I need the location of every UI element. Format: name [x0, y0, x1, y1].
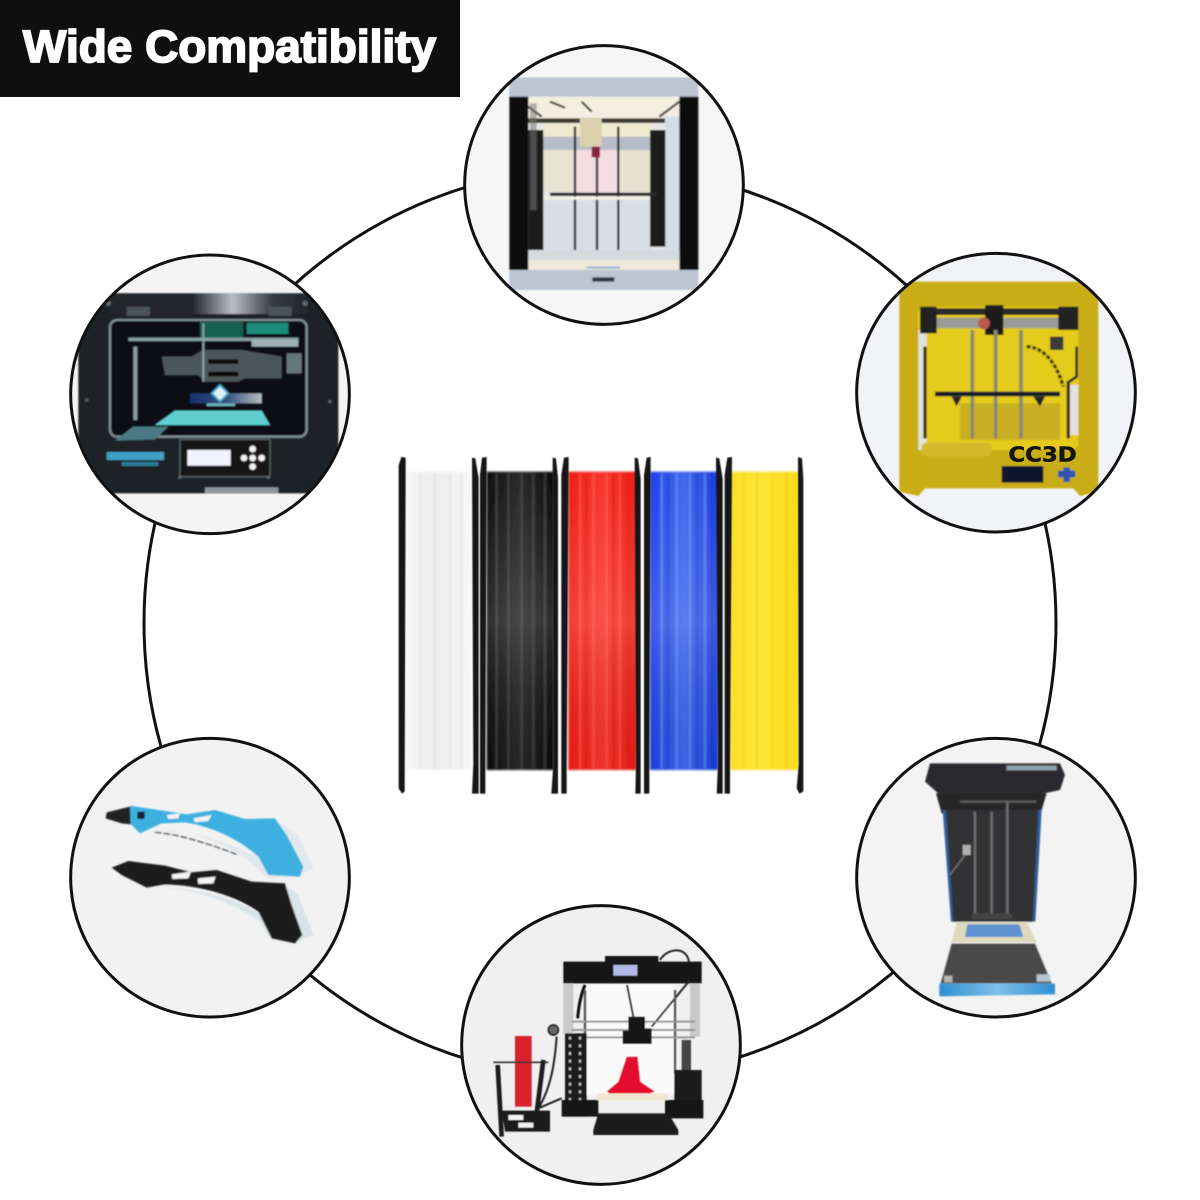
- connecting ring: [144, 167, 1056, 1079]
- filament spools, center: [399, 457, 803, 794]
- spool: yellow: [730, 472, 798, 770]
- pale underside of blue pen: [145, 822, 313, 878]
- spool flanges: [399, 457, 803, 794]
- panel: cube frame printer, top: [465, 46, 743, 324]
- logo text: CC3D: [1008, 442, 1077, 466]
- spool: red: [568, 472, 637, 770]
- panel: yellow CC3D printer, right: [857, 253, 1135, 532]
- title text: Wide Compatibility: [23, 21, 436, 72]
- panel: Prusa-style kit printer, bottom: [462, 906, 740, 1184]
- blue pen body: [130, 806, 303, 877]
- spool: white: [407, 472, 472, 770]
- panel: 3D pens, lower left: [71, 738, 349, 1017]
- panel: black and blue printer, lower right: [857, 738, 1135, 1017]
- title banner: [0, 0, 460, 97]
- black pen body: [112, 861, 302, 943]
- pale underside of black pen: [148, 885, 313, 942]
- spool: blue: [650, 472, 718, 770]
- spool: black: [487, 472, 554, 770]
- panel: enclosed dark printer, left: [71, 255, 349, 534]
